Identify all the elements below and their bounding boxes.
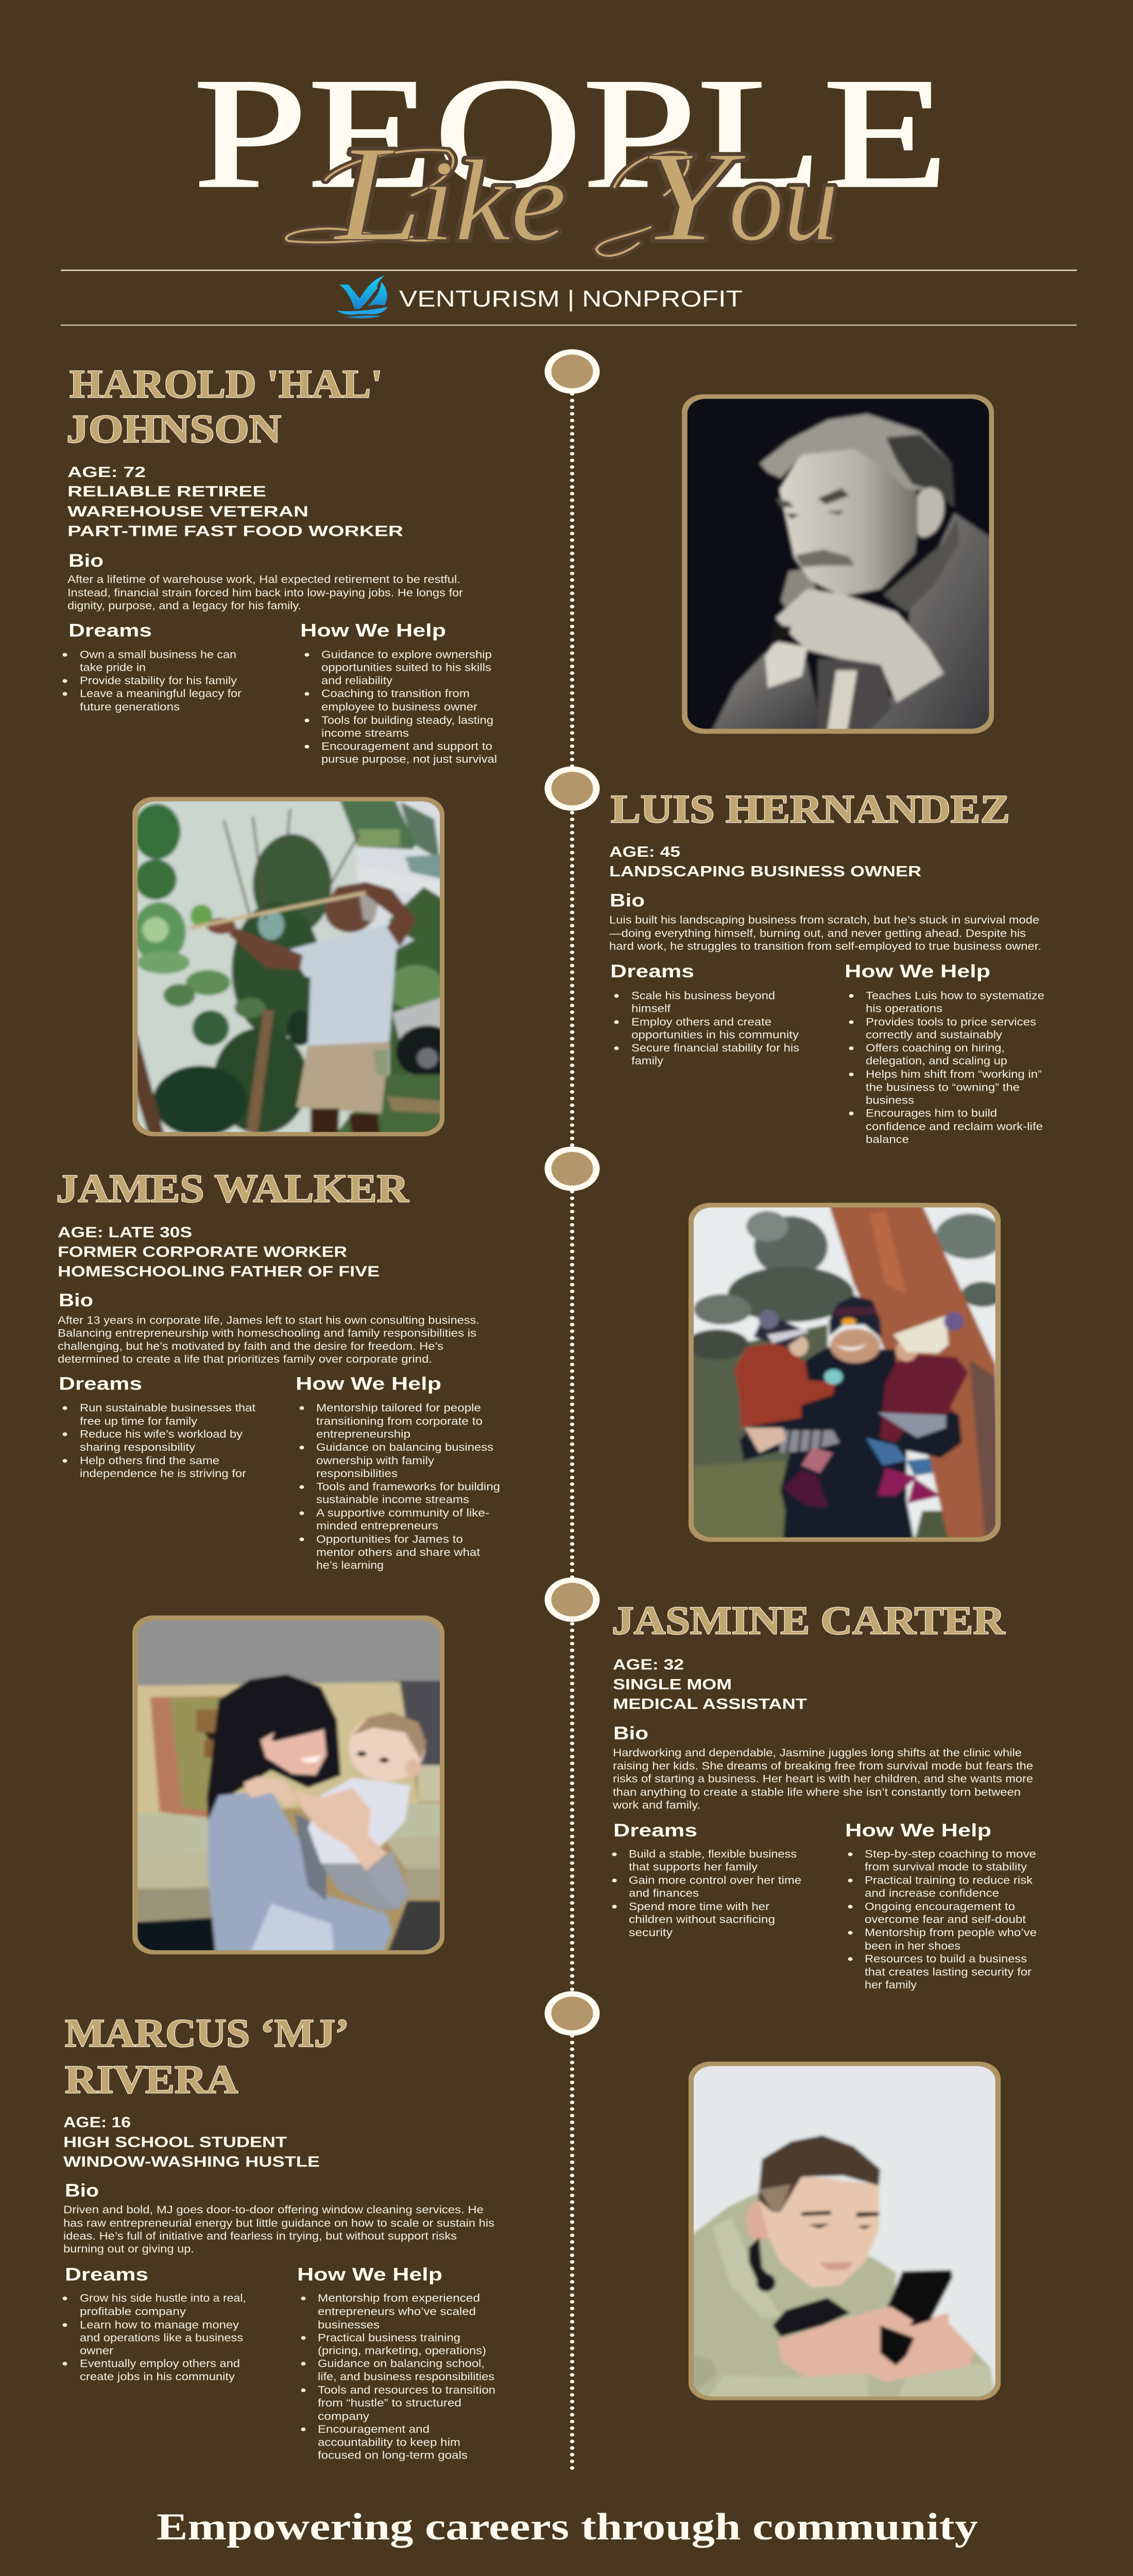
bio text: Instead, financial strain forced him back into low-paying jobs. He longs for xyxy=(67,587,463,599)
help list: Practical training to reduce risk xyxy=(865,1875,1033,1887)
profile lines: AGE: LATE 30S xyxy=(58,1224,192,1241)
help list: from “hustle” to structured xyxy=(318,2397,461,2409)
bio text: burning out or giving up. xyxy=(63,2243,194,2255)
profile lines: AGE: 32 xyxy=(613,1656,684,1673)
dreams heading: Dreams xyxy=(59,1374,142,1394)
icon: sailboat logo xyxy=(337,276,388,318)
panel: Luis Hernandez xyxy=(609,787,1044,1146)
help list: business xyxy=(866,1095,914,1107)
brand name: VENTURISM | NONPROFIT xyxy=(399,286,743,312)
bio text xyxy=(63,2204,494,2255)
dreams list: owner xyxy=(80,2345,113,2357)
profile lines: RELIABLE RETIREE xyxy=(67,483,266,500)
bio text: Driven and bold, MJ goes door-to-door offering window cleaning services. He xyxy=(63,2204,484,2216)
dreams list: Learn how to manage money xyxy=(80,2319,239,2331)
panel: Harold Johnson xyxy=(63,362,497,766)
dreams heading: Dreams xyxy=(65,2265,148,2285)
title xyxy=(193,45,949,269)
footer tagline: Empowering careers through community xyxy=(157,2506,978,2548)
profile lines xyxy=(609,843,921,879)
help list: Encouragement and xyxy=(318,2424,430,2435)
dreams list: and finances xyxy=(629,1888,699,1900)
title script: Like You: ou xyxy=(729,137,838,265)
panel: James Walker xyxy=(56,1166,500,1571)
dreams list: Help others find the same xyxy=(80,1455,219,1467)
dreams list: Provide stability for his family xyxy=(80,675,237,687)
title script: Like You: ike xyxy=(420,137,566,265)
help list: responsibilities xyxy=(316,1468,398,1480)
name: JAMES WALKER xyxy=(56,1166,409,1210)
help list: accountability to keep him xyxy=(318,2437,460,2449)
help list: focused on long-term goals xyxy=(318,2450,468,2462)
dreams list: Eventually employ others and xyxy=(80,2358,240,2370)
help list: from survival mode to stability xyxy=(865,1861,1027,1873)
profile lines: WAREHOUSE VETERAN xyxy=(67,503,308,520)
profile lines: SINGLE MOM xyxy=(613,1675,732,1692)
dreams list: Grow his side hustle into a real, xyxy=(80,2293,246,2304)
help list xyxy=(848,1849,1037,1991)
bio heading: Bio xyxy=(59,1290,93,1310)
bio text xyxy=(67,574,463,612)
profile lines xyxy=(63,2113,320,2170)
photo: Marcus, teen with headphones and phone xyxy=(689,2061,1004,2401)
panel: Jasmine Carter xyxy=(612,1598,1037,1991)
help list: Encourages him to build xyxy=(866,1108,997,1120)
name: JOHNSON xyxy=(66,406,281,451)
photo: Jasmine holding her baby on a sofa xyxy=(132,1615,447,1957)
help list: Practical business training xyxy=(318,2332,460,2344)
help list: Opportunities for James to xyxy=(316,1534,463,1546)
dreams list: Gain more control over her time xyxy=(629,1875,801,1887)
dreams list: profitable company xyxy=(80,2306,186,2318)
profile lines: WINDOW-WASHING HUSTLE xyxy=(63,2153,320,2170)
help list: and reliability xyxy=(321,675,392,687)
bio text: Luis built his landscaping business from scratch, but he’s stuck in survival mode xyxy=(609,914,1039,926)
bio text: has raw entrepreneurial energy but little guidance on how to scale or sustain his xyxy=(63,2217,494,2229)
bio text: work and family. xyxy=(612,1800,700,1811)
dreams list xyxy=(614,990,799,1067)
help list: Guidance to explore ownership xyxy=(321,649,492,661)
help list: Ongoing encouragement to xyxy=(865,1901,1015,1913)
profile lines: FORMER CORPORATE WORKER xyxy=(58,1243,347,1260)
help list: company xyxy=(318,2411,369,2422)
help list: Provides tools to price services xyxy=(866,1016,1036,1028)
dreams list: take pride in xyxy=(80,662,146,674)
bio text: ideas. He’s full of initiative and fearless in trying, but without support risks xyxy=(63,2230,457,2242)
bio text xyxy=(609,914,1041,953)
bio heading: Bio xyxy=(610,891,645,911)
help list: life, and business responsibilities xyxy=(318,2371,494,2383)
bio text: raising her kids. She dreams of breaking free from survival mode but fears the xyxy=(613,1760,1033,1772)
help list: businesses xyxy=(318,2319,380,2331)
help list: Guidance on balancing school, xyxy=(318,2358,485,2370)
profile lines: PART-TIME FAST FOOD WORKER xyxy=(67,522,403,539)
help list xyxy=(300,1402,500,1571)
help list: delegation, and scaling up xyxy=(866,1055,1007,1067)
dreams list: Own a small business he can xyxy=(80,649,236,661)
dreams list: Leave a meaningful legacy for xyxy=(80,688,242,700)
bio text: determined to create a life that prioritizes family over corporate grind. xyxy=(58,1353,432,1365)
dreams list xyxy=(63,1402,255,1480)
help list: sustainable income streams xyxy=(316,1494,469,1506)
dreams list: create jobs in his community xyxy=(80,2371,235,2383)
help list: transitioning from corporate to xyxy=(316,1416,483,1428)
title script: Like You: ike xyxy=(420,137,566,265)
photo: Luis, landscaper pruning plants xyxy=(132,796,459,1137)
help list: A supportive community of like- xyxy=(316,1507,489,1519)
profile lines: AGE: 72 xyxy=(67,463,146,480)
help list: Step-by-step coaching to move xyxy=(865,1849,1036,1860)
title script: Like You: ou xyxy=(729,137,838,265)
help list: Tools for building steady, lasting xyxy=(321,715,493,726)
dreams list: free up time for family xyxy=(80,1416,197,1428)
help list: Resources to build a business xyxy=(865,1953,1027,1965)
name: MARCUS ‘MJ’ xyxy=(65,2011,349,2055)
profile lines xyxy=(67,463,403,539)
dreams list: Run sustainable businesses that xyxy=(80,1402,255,1414)
dreams list: Scale his business beyond xyxy=(631,990,775,1002)
bio text: than anything to create a stable life where she isn’t constantly torn between xyxy=(613,1787,1021,1799)
title script: Like You: L xyxy=(332,117,422,269)
title script: Like You: Y xyxy=(639,125,748,267)
photo: Harold, elderly man with cane xyxy=(681,391,997,735)
name xyxy=(65,2011,349,2102)
dreams list xyxy=(63,2293,246,2383)
dreams list: sharing responsibility xyxy=(80,1442,195,1453)
help list: overcome fear and self-doubt xyxy=(865,1914,1026,1926)
profile lines: HOMESCHOOLING FATHER OF FIVE xyxy=(58,1263,380,1280)
panel: Marcus Rivera xyxy=(63,2011,495,2462)
help list xyxy=(301,2293,495,2462)
help list: Helps him shift from “working in” xyxy=(866,1069,1042,1080)
name: LUIS HERNANDEZ xyxy=(611,787,1010,831)
bio text: challenging, but he’s motivated by faith and the desire for freedom. He’s xyxy=(58,1341,443,1352)
help list: minded entrepreneurs xyxy=(316,1520,438,1532)
help list: Guidance on balancing business xyxy=(316,1442,493,1453)
dreams list: Secure financial stability for his xyxy=(631,1042,799,1054)
how we help heading: How We Help xyxy=(297,2265,442,2285)
help list: Tools and frameworks for building xyxy=(316,1481,500,1493)
help list: his operations xyxy=(866,1003,942,1015)
dreams list: and operations like a business xyxy=(80,2332,243,2344)
photo: James carrying two children by a pine tree xyxy=(686,1201,1004,1542)
help list: correctly and sustainably xyxy=(866,1029,1002,1041)
help list: Mentorship from experienced xyxy=(318,2293,480,2304)
profile lines: LANDSCAPING BUSINESS OWNER xyxy=(609,862,921,879)
dreams list: Spend more time with her xyxy=(629,1901,769,1913)
help list xyxy=(305,649,497,766)
dreams heading: Dreams xyxy=(68,620,152,640)
help list: income streams xyxy=(321,727,409,739)
profile lines: HIGH SCHOOL STUDENT xyxy=(63,2133,287,2150)
help list: confidence and reclaim work-life xyxy=(866,1121,1043,1133)
dreams list xyxy=(612,1849,801,1939)
title word: PEOPLE: PEOPLE xyxy=(193,45,949,221)
dreams list: himself xyxy=(631,1003,671,1015)
help list: that creates lasting security for xyxy=(865,1967,1032,1978)
profile lines xyxy=(58,1224,380,1280)
help list: Offers coaching on hiring, xyxy=(866,1042,1005,1054)
profile lines: AGE: 45 xyxy=(609,843,680,860)
title script: Like You: L xyxy=(332,117,422,269)
bio text: After 13 years in corporate life, James left to start his own consulting business. xyxy=(58,1315,479,1327)
help list: balance xyxy=(866,1134,909,1146)
bio heading: Bio xyxy=(65,2181,99,2201)
help list: Teaches Luis how to systematize xyxy=(866,990,1044,1002)
help list: Coaching to transition from xyxy=(321,688,470,700)
help list: her family xyxy=(865,1979,917,1991)
help list: entrepreneurs who’ve scaled xyxy=(318,2306,476,2318)
dreams list: future generations xyxy=(80,701,180,713)
help list: employee to business owner xyxy=(321,701,477,713)
bio heading: Bio xyxy=(613,1723,648,1743)
brand band xyxy=(61,269,1077,326)
name: HAROLD 'HAL' xyxy=(70,362,383,406)
help list: Tools and resources to transition xyxy=(318,2384,495,2396)
help list: Mentorship from people who’ve xyxy=(865,1927,1037,1939)
bio text: risks of starting a business. Her heart is with her children, and she wants more xyxy=(613,1773,1033,1785)
help list: been in her shoes xyxy=(865,1940,960,1952)
profile lines xyxy=(613,1656,807,1712)
help list: Mentorship tailored for people xyxy=(316,1402,481,1414)
dreams list: independence he is striving for xyxy=(80,1468,246,1480)
dreams heading: Dreams xyxy=(613,1820,697,1841)
dreams list: Build a stable, flexible business xyxy=(629,1849,797,1860)
help list: and increase confidence xyxy=(865,1888,999,1900)
help list: Encouragement and support to xyxy=(321,741,492,753)
dreams list: opportunities in his community xyxy=(631,1029,799,1041)
help list: mentor others and share what xyxy=(316,1547,480,1558)
bio text xyxy=(612,1747,1033,1811)
bio text: hard work, he struggles to transition from self-employed to true business owner. xyxy=(609,941,1041,953)
dreams list: Employ others and create xyxy=(631,1016,771,1028)
timeline xyxy=(548,352,596,2471)
help list: opportunities suited to his skills xyxy=(321,662,491,674)
dreams list xyxy=(63,649,242,713)
dreams list: that supports her family xyxy=(629,1861,758,1873)
help list: (pricing, marketing, operations) xyxy=(318,2345,486,2357)
how we help heading: How We Help xyxy=(300,620,446,640)
help list: pursue purpose, not just survival xyxy=(321,754,497,766)
help list xyxy=(849,990,1044,1146)
name: RIVERA xyxy=(65,2057,238,2102)
help list: he’s learning xyxy=(316,1560,384,1571)
help list: the business to “owning” the xyxy=(866,1082,1020,1094)
dreams list: children without sacrificing xyxy=(629,1914,775,1926)
dreams list: security xyxy=(629,1927,673,1939)
name xyxy=(66,362,383,451)
dreams list: family xyxy=(631,1055,663,1067)
bio heading: Bio xyxy=(68,551,104,571)
name: JASMINE CARTER xyxy=(612,1598,1005,1642)
bio text: dignity, purpose, and a legacy for his family. xyxy=(67,600,301,612)
how we help heading: How We Help xyxy=(296,1374,441,1394)
dreams heading: Dreams xyxy=(610,961,694,981)
profile lines: AGE: 16 xyxy=(63,2113,131,2130)
title script: Like You xyxy=(286,117,838,269)
how we help heading: How We Help xyxy=(845,961,990,981)
profile lines: MEDICAL ASSISTANT xyxy=(613,1695,807,1712)
bio text: —doing everything himself, burning out, and never getting ahead. Despite his xyxy=(609,928,1026,940)
title script: Like You: Y xyxy=(639,125,748,267)
bio text: Balancing entrepreneurship with homeschooling and family responsibilities is xyxy=(58,1328,476,1340)
how we help heading: How We Help xyxy=(845,1820,991,1841)
dreams list: Reduce his wife’s workload by xyxy=(80,1429,243,1440)
help list: entrepreneurship xyxy=(316,1429,410,1440)
help list: ownership with family xyxy=(316,1455,434,1467)
bio text: After a lifetime of warehouse work, Hal expected retirement to be restful. xyxy=(67,574,460,586)
bio text: Hardworking and dependable, Jasmine juggles long shifts at the clinic while xyxy=(613,1747,1022,1759)
bio text xyxy=(58,1315,479,1365)
